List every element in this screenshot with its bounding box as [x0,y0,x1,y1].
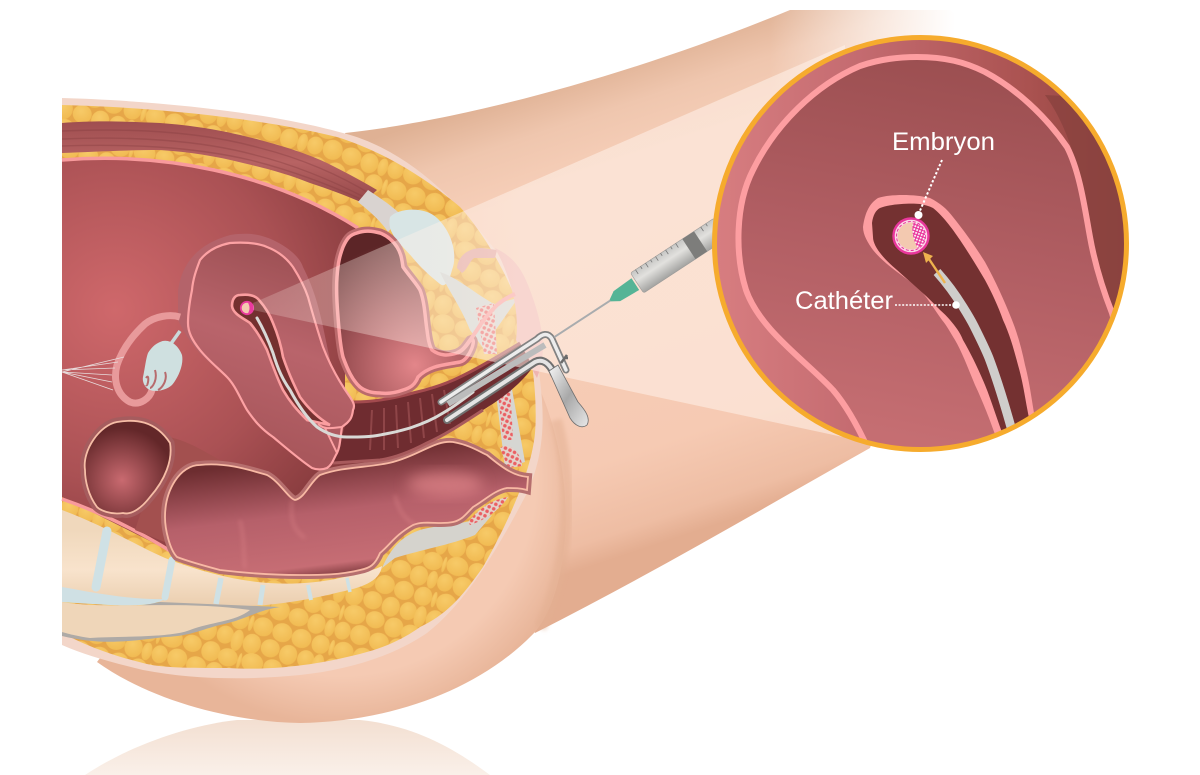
urethra [457,294,515,353]
bowel loop [85,421,240,545]
orange lens ring [714,38,1126,450]
body: buttock [97,385,566,723]
uterus [178,234,354,470]
fat layer [62,105,536,669]
abdominal muscle [62,121,402,232]
magnification cone [253,45,845,437]
body: thigh [345,0,1055,633]
magnified view [710,30,1140,470]
spinal canal tissue [62,602,250,638]
speculum lower blade [447,361,554,420]
uterine wall [738,57,1130,470]
peritoneum line bottom [62,499,172,552]
sacral vessels [468,497,508,525]
right outer shadow [1045,95,1104,278]
spine [62,510,382,606]
callout: catheter: Cathéter [795,287,893,315]
connective tissue [440,272,518,348]
catheter tip arrow [923,252,945,283]
speculum upper blade [441,334,566,402]
peritoneum line top [62,158,358,228]
blue meninges [62,587,165,605]
labia [495,248,543,378]
plunger [682,231,707,259]
sacral tissue [382,515,492,568]
callout: catheter [795,287,960,315]
outer wall [717,40,1124,438]
fimbriae [62,357,124,390]
floor reflection [85,720,490,775]
embryo magnified [894,218,928,254]
barrel [630,218,727,293]
catheter in uterus [257,318,473,437]
ovary ligament [170,331,180,345]
uterine cavity [232,295,330,425]
abdominal cavity [62,158,385,552]
pelvic section [62,98,543,678]
grey membrane [62,602,280,642]
speculum screw [561,355,568,363]
catheter magnified [937,272,1014,438]
cavity interior [872,204,1028,430]
cavity lining [863,195,1034,433]
vaginal canal [333,343,533,463]
bladder [337,231,473,393]
embryo small [241,302,253,314]
graduations [635,224,708,274]
needle [554,297,615,338]
needle hub [606,278,639,306]
callout: embryo [892,128,995,219]
vascular tissue [476,303,525,468]
skin rim [62,98,543,678]
rectum [165,442,528,575]
fallopian tube [116,316,180,403]
syringe [548,218,727,347]
clitoris [457,248,497,273]
speculum handle [549,365,588,427]
speculum [441,334,588,427]
pubic bone [389,210,454,285]
callout: embryo: Embryon [892,128,995,156]
speculum middle blade [448,345,545,404]
ovary [143,341,182,391]
lens content [717,40,1124,447]
